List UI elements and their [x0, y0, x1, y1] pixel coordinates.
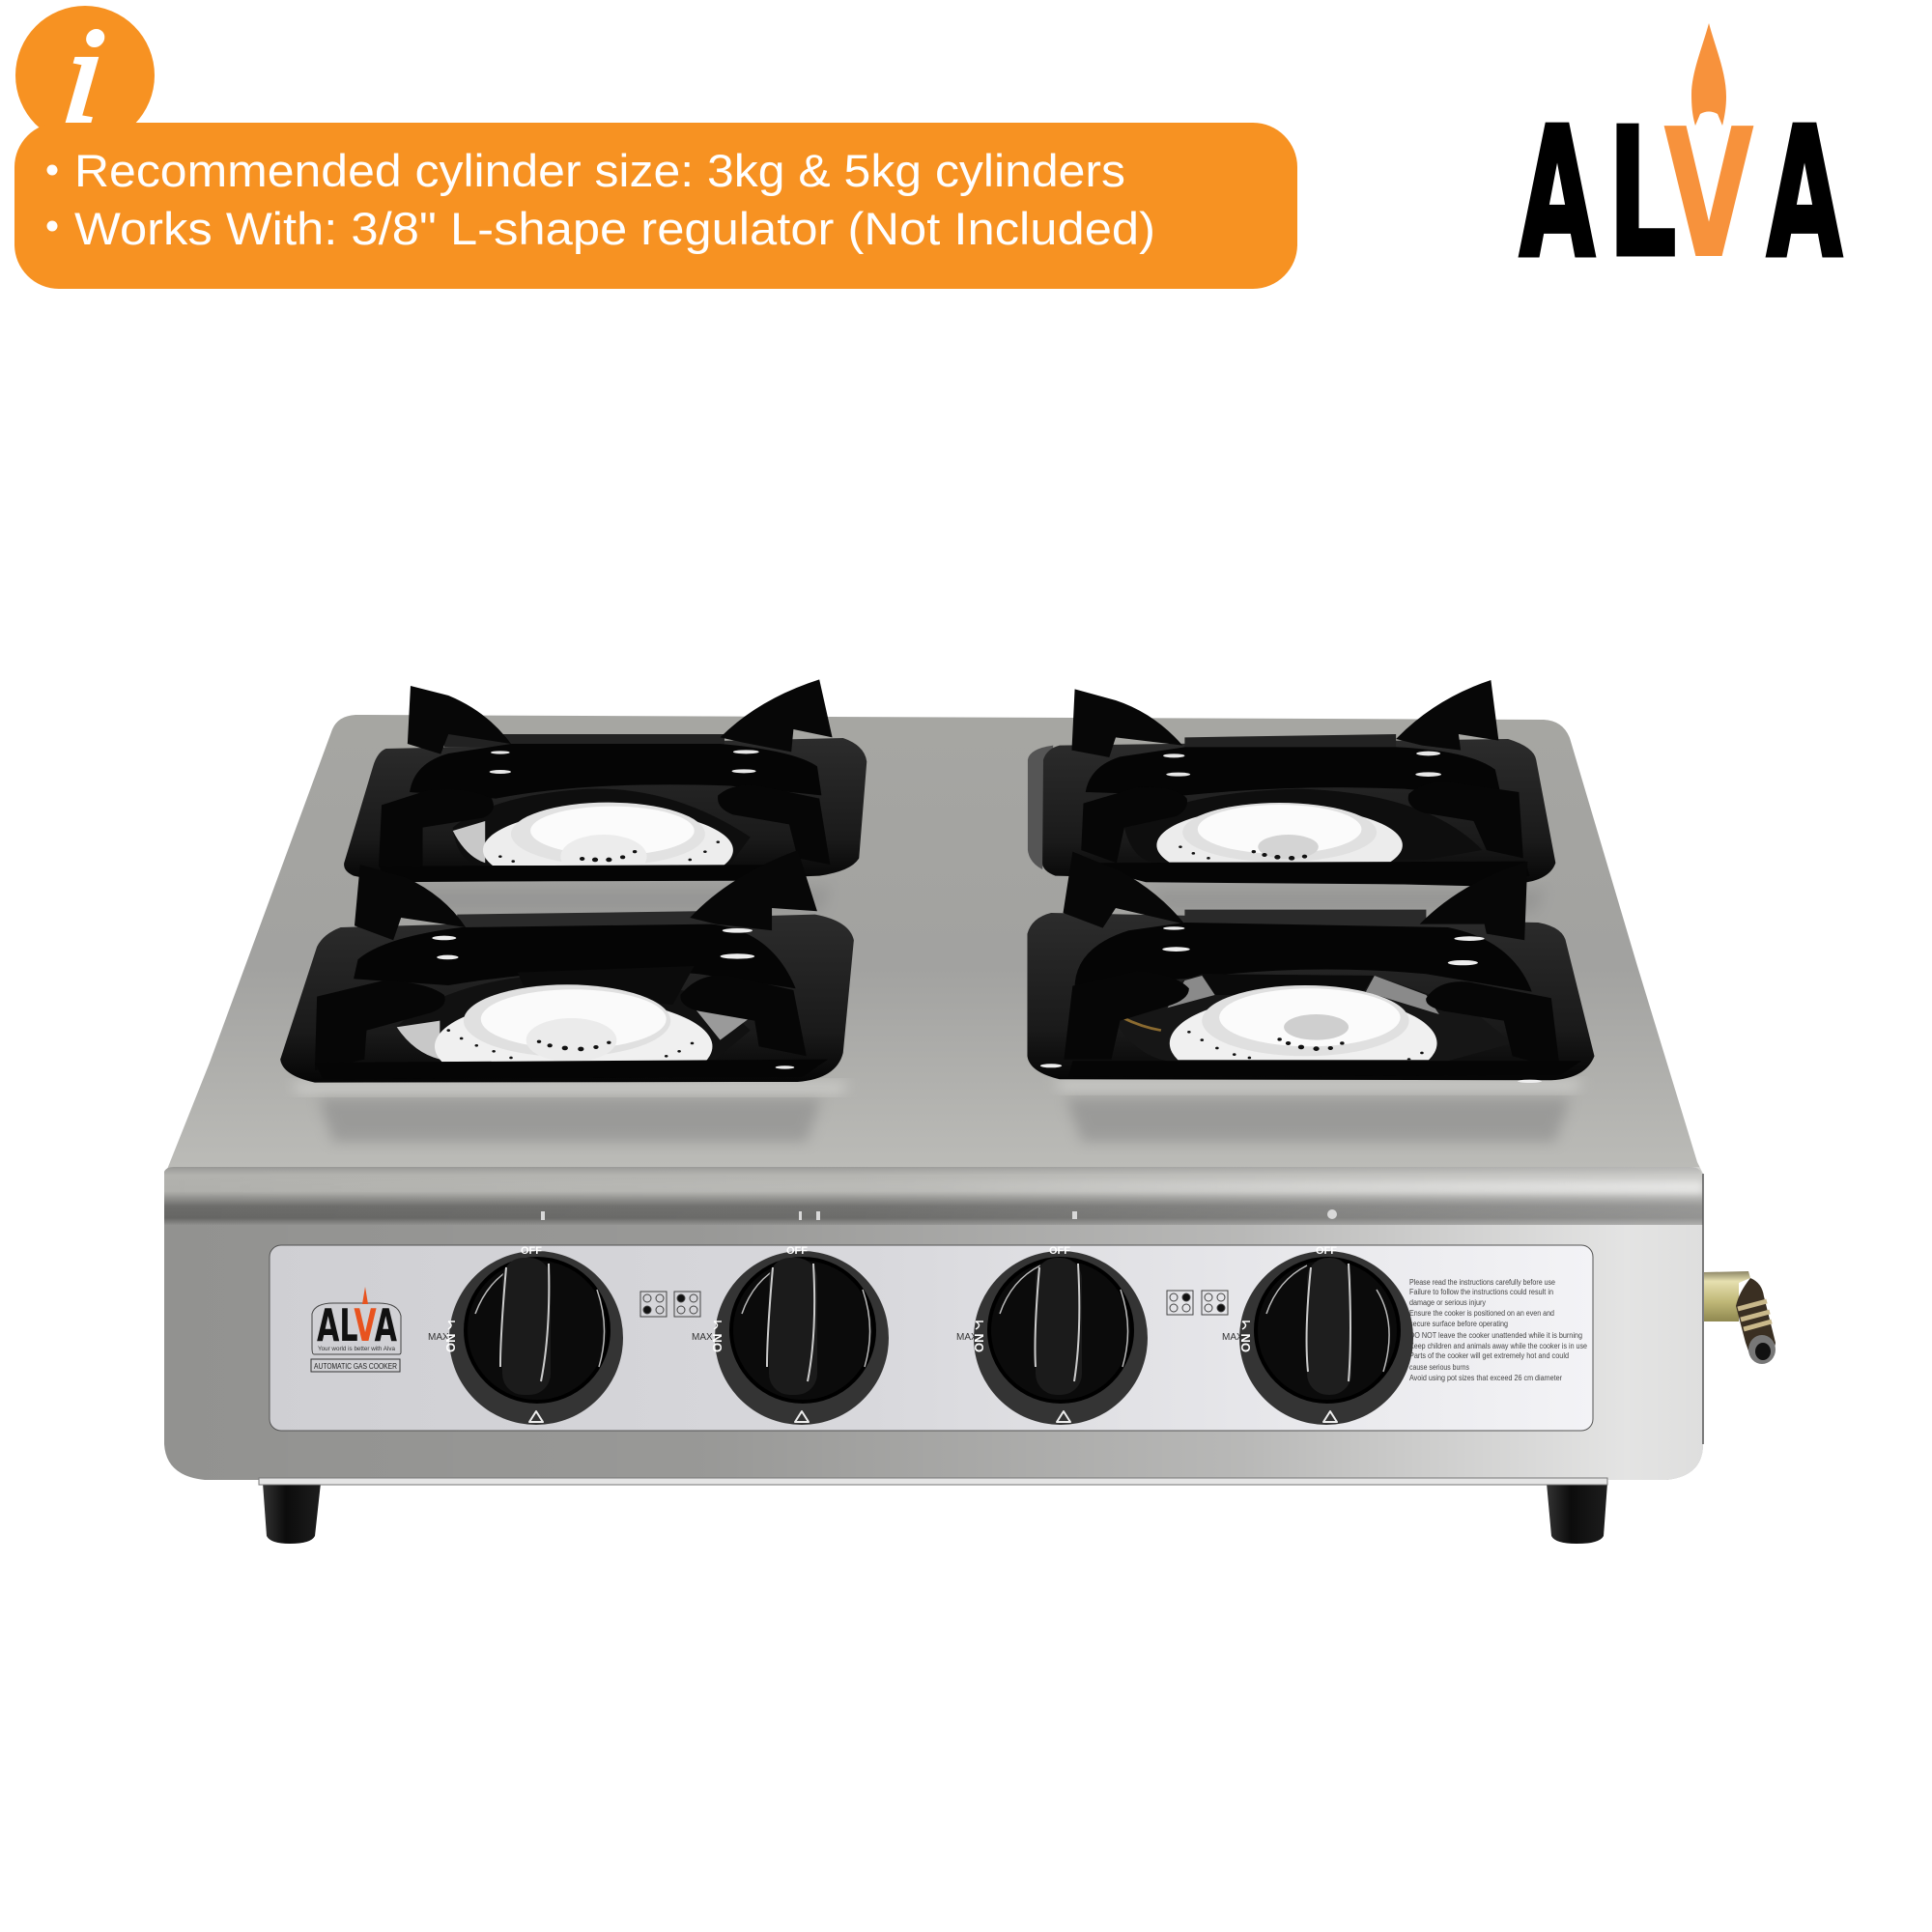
instructions text: Keep children and animals away while the cooker is in use: [1409, 1342, 1587, 1350]
burner indicator icons: [640, 1291, 1228, 1317]
cooktop surface: [164, 715, 1703, 1174]
knob 3: OFF: [1049, 1245, 1070, 1257]
instructions text: Parts of the cooker will get extremely hot and could: [1409, 1351, 1569, 1360]
instructions text: Please read the instructions carefully before use: [1409, 1278, 1555, 1287]
knob 1: [428, 1245, 623, 1425]
gas inlet nozzle: [1704, 1271, 1776, 1364]
fascia bend band: [164, 1167, 1703, 1225]
knob 2: [692, 1245, 889, 1425]
burner: front left: [280, 850, 854, 1094]
instructions text: damage or serious injury: [1409, 1298, 1486, 1307]
surface reflections: [290, 887, 1584, 1142]
gas cooker: [164, 679, 1776, 1544]
instructions text: secure surface before operating: [1409, 1320, 1508, 1328]
knob 2: OFF: [786, 1245, 808, 1257]
burner: front right: [1027, 852, 1594, 1092]
knob 1: MAX: [428, 1332, 449, 1343]
panel logo: AUTOMATIC GAS COOKER: [314, 1362, 397, 1371]
panel logo: ALVA: [317, 1299, 397, 1351]
info badge icon: [15, 0, 155, 152]
fascia lower sheen: [164, 1225, 1703, 1480]
instructions text: Ensure the cooker is positioned on an even and: [1409, 1309, 1554, 1318]
panel logo: Your world is better with Alva: [318, 1346, 395, 1352]
band highlight: [164, 1180, 1703, 1194]
banner text: regulator: Works With: 3/8" L-shape regulator (Not Included): [74, 203, 1155, 254]
knob 3: ON: [972, 1333, 986, 1352]
band screws: [541, 1209, 1337, 1220]
rubber foot left: [263, 1483, 321, 1544]
knob 3: MAX: [956, 1332, 978, 1343]
instructions text: DO NOT leave the cooker unattended while it is burning: [1409, 1331, 1582, 1340]
control panel: [270, 1245, 1593, 1431]
brand logo: V: [1663, 90, 1754, 298]
knob 4: OFF: [1316, 1245, 1337, 1257]
instructions text: Failure to follow the instructions could result in: [1409, 1288, 1553, 1296]
brand logo: A: [1767, 89, 1842, 298]
base rail: [259, 1478, 1607, 1485]
info badge icon: i: [57, 0, 111, 152]
fascia edge line: [1702, 1174, 1704, 1444]
burner: back left: [344, 679, 867, 891]
brand logo: A: [1520, 89, 1595, 298]
knob 4: [1222, 1245, 1413, 1425]
front fascia: [164, 1198, 1703, 1480]
knob 1: ON: [443, 1333, 458, 1352]
instructions text: Avoid using pot sizes that exceed 26 cm diameter: [1409, 1374, 1562, 1382]
brand logo: L: [1607, 89, 1677, 298]
instructions text: [1409, 1278, 1587, 1382]
knob 2: MAX: [692, 1332, 713, 1343]
knob 1: OFF: [521, 1245, 542, 1257]
banner text: cylinder size: Recommended cylinder size: 3kg & 5kg cylinders: [74, 145, 1125, 196]
logo flame: [1691, 23, 1726, 126]
knob 2: ON: [710, 1333, 724, 1352]
knob 4: ON: [1238, 1333, 1253, 1352]
knob 4: MAX: [1222, 1332, 1243, 1343]
instructions text: cause serious burns: [1409, 1363, 1469, 1372]
band sheen: [164, 1167, 1703, 1225]
info banner: [14, 123, 1297, 289]
rubber foot right: [1547, 1483, 1607, 1544]
panel logo: [311, 1287, 401, 1372]
burner: back right: [1028, 680, 1555, 886]
knob 3: [956, 1245, 1148, 1425]
brand logo: [1520, 23, 1842, 298]
